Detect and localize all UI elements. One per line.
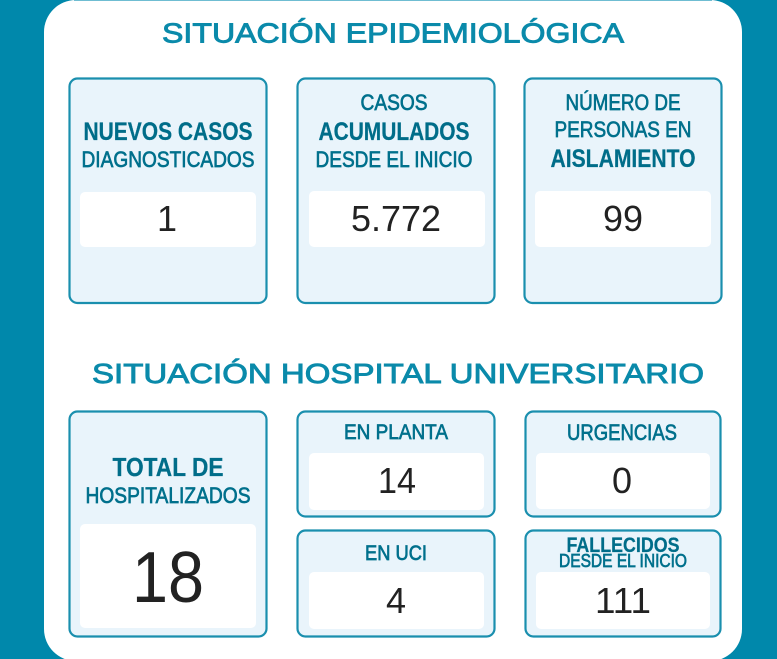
- panel: nuevos casos: DIAGNOSTICADOS: [82, 147, 254, 172]
- panel: nuevos casos: [70, 78, 266, 303]
- title: situación hospital universitario: SITUACIÓN HOSPITAL UNIVERSITARIO: [92, 358, 704, 389]
- panel: total de hospitalizados: [70, 412, 266, 636]
- panel: personas en aislamiento: PERSONAS EN: [554, 117, 692, 142]
- panel: en uci: 4: [386, 580, 406, 621]
- panel: casos acumulados: ACUMULADOS: [318, 118, 470, 146]
- panel: total de hospitalizados: HOSPITALIZADOS: [86, 483, 250, 508]
- panel: nuevos casos: NUEVOS CASOS: [84, 118, 252, 146]
- panel: en planta: 14: [378, 460, 416, 501]
- panel: personas en aislamiento: AISLAMIENTO: [550, 145, 696, 173]
- panel: urgencias: [526, 412, 720, 516]
- panel: casos acumulados: [298, 78, 494, 303]
- panel: fallecidos: DESDE EL INICIO: [559, 551, 687, 571]
- panel: fallecidos: [526, 530, 720, 636]
- panel: personas en aislamiento: [524, 78, 722, 303]
- title: situación epidemiológica: SITUACIÓN EPIDEMIOLÓGICA: [162, 18, 624, 48]
- panel: casos acumulados: CASOS: [360, 90, 428, 115]
- panel: casos acumulados: 5.772: [351, 198, 441, 239]
- panel: fallecidos: 111: [595, 580, 651, 621]
- panel: en uci: EN UCI: [365, 541, 427, 565]
- panel: total de hospitalizados: TOTAL DE: [112, 452, 224, 482]
- panel: personas en aislamiento: NÚMERO DE: [566, 90, 680, 115]
- panel: urgencias: 0: [612, 460, 632, 501]
- panel: fallecidos: FALLECIDOS: [566, 534, 680, 557]
- panel: total de hospitalizados: 18: [132, 538, 204, 618]
- panel: nuevos casos: 1: [157, 198, 177, 239]
- panel: en planta: [298, 412, 494, 516]
- panel: urgencias: URGENCIAS: [567, 420, 677, 445]
- panel: casos acumulados: DESDE EL INICIO: [316, 147, 472, 172]
- panel: en planta: EN PLANTA: [344, 420, 449, 444]
- panel: personas en aislamiento: 99: [603, 198, 643, 239]
- panel: en uci: [298, 530, 494, 636]
